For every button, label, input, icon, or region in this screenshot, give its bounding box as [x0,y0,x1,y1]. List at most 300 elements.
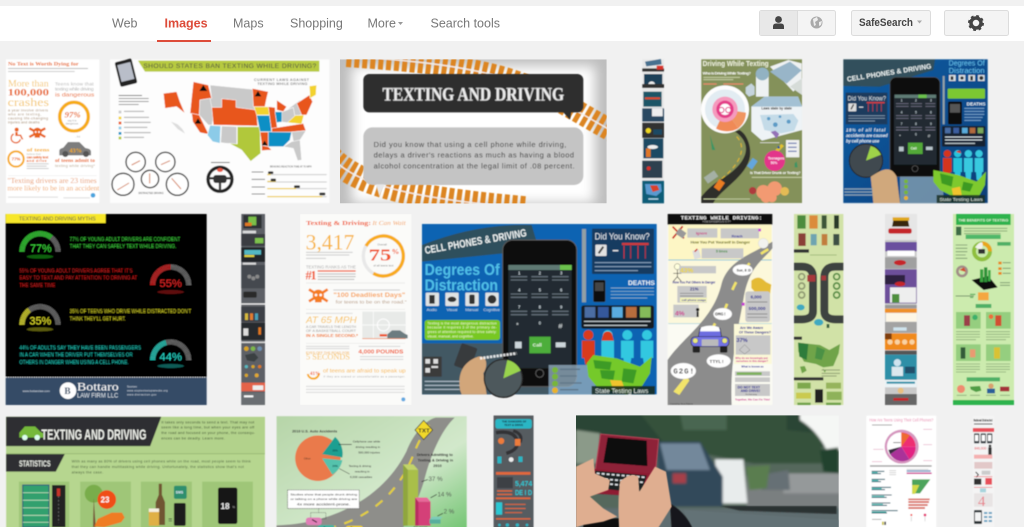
dashboard [683,510,840,527]
grey body speech bubble: delays a driver's reactions as much as having a blood [374,151,574,160]
smartphone: 6 [930,110,932,114]
block: others in danger: Sue, 8 :D [737,268,752,272]
nav tab: More: More [368,16,396,30]
thumbnail: Texting and Driving Myths gauges: OTHERS IN DANGER WHEN USING A CELL PHONE. [19,360,129,366]
thumbnail: Texting & Driving: It Can Wait [300,214,412,405]
smartphone: # [928,134,931,140]
thumbnail: Texting & Driving: It Can Wait: TEXTING RANKS AS THE [306,265,356,270]
thumbnail: National Distracted infographic: 4 [978,494,986,510]
pie chart [885,430,919,464]
personal results toggle [760,10,836,36]
smartphone: 3 [560,270,563,275]
did you know panel [592,229,654,274]
thumbnail: Texting & Driving: It Can Wait: for teens to be on the road." [336,299,407,304]
footer band: B [64,387,71,397]
smartphone: * [899,134,901,140]
thumbnail: No Text is Worth Dying For: who are texting, [8,113,41,117]
green callout [425,320,500,340]
thumbnail: Driving While Texting: Is That Driver Drunk or Texting? [750,171,801,175]
radial chart [701,85,749,133]
thumbnail: green road infographic [794,214,843,405]
green callout: Texting is the most dangerous distraction [427,321,497,325]
statistics tab [6,454,65,472]
thumbnail: Texting and Driving Myths gauges: THE SAME TIME [19,283,56,289]
footer band: www.bottarolaw.com [23,389,50,393]
speech bubble: OMG [713,308,732,320]
block: are we aware: Are We Aware [740,326,763,330]
3D bar chart: 37 % [428,476,443,483]
pie chart [292,429,381,481]
thumbnail: Texting & Driving: It Can Wait: 3,417 [306,229,354,254]
smartphone: 7 [901,122,903,126]
legend panel [549,365,595,394]
data panel: laws by state: Laws state by state [761,107,792,111]
winding road [701,130,750,203]
3D bar chart [403,464,455,527]
smartphone: 6 [560,288,563,293]
thumbnail: Texting and Driving statistics green: ences can be deadly. Learn more. [161,437,225,441]
smartphone: 1 [901,99,903,103]
pie chart: 2010 U.S. Auto Accidents [292,429,337,433]
thumbnail: National Distracted infographic: 846,000 [974,446,987,450]
block: text boxes: Reach [732,235,743,239]
block: are we aware: AND DRIVE! [741,389,760,393]
thumbnail: National Distracted infographic [973,416,994,527]
footer band: www.distraction.gov [127,392,157,396]
thumbnail: No Text is Worth Dying For: texting while driving* [55,163,95,168]
distraction icons: Cognitive [483,307,501,312]
thumbnail: Driving While Texting: Driving While Texting [703,61,769,68]
studies callout: Studies show that people drunk driving [290,492,358,496]
speedometer dials [112,152,188,195]
block: are we aware: What is known as [741,364,764,368]
thumbnail: Texting & Driving: It Can Wait: 4,000 POUNDS [358,350,404,356]
thumbnail: Driving While Texting: Who is Driving While Texting? [703,71,752,76]
people icons [582,330,653,365]
tyre tracks [340,59,607,204]
thumbnail: Cell Phones and Driving: Distraction [949,68,985,75]
thumbnail: Texting and Driving statistics green: the road and focused on your phone, the consequ- [161,431,256,435]
footer band [6,377,207,405]
thumbnail: No Text is Worth Dying For: "Texting drivers are 23 times [7,177,97,185]
map of state testing laws [587,355,655,395]
thumbnail: No Text is Worth Dying For: is dangerous [55,92,95,98]
grey body speech bubble: alcohol concentration at the legal limit of .08 percent. [374,161,575,170]
thumbnail: No Text is Worth Dying For: 77% [12,156,20,161]
thumbnail: No Text is Worth Dying For: more likely to be in an accident [7,184,99,192]
gauge 35% [22,307,58,325]
thumbnail: Texting and Driving Myths gauges: 77% [30,243,52,255]
pie chart: Other [304,456,311,460]
SafeSearch button: SafeSearch [859,17,913,29]
dark title speech bubble: TEXTING AND DRIVING [382,85,564,106]
thumbnail: Cell Phones and Driving: State Testing Laws [939,197,983,203]
smartphone: 2 [539,270,542,275]
thumbnail: No Text is Worth Dying For: can safely text [27,156,49,160]
top grey strip [0,0,1024,6]
thumbnail: Texting & Driving: It Can Wait: 5 SECONDS [306,352,350,361]
smartphone: 9 [930,122,932,126]
thumbnail: No Text is Worth Dying For: injuries and deaths [8,120,40,124]
heading: degrees of distraction: Degrees Of [425,262,500,279]
thumbnail: tall dark blue infographic [642,59,664,203]
braking reaction chart [252,166,327,197]
thumbnail: photo of hands texting at the wheel [573,413,843,527]
thumbnail: Driving While Texting [701,59,802,203]
cartoon car [691,326,729,353]
thumbnail: Texting and Driving Myths gauges: 35% OF TEENS WHO DRIVE WHILE DISTRACTED DON'T [70,309,192,315]
block: others in danger: How You Put Others in Danger [673,280,716,284]
deaths block: DEATHS [628,280,655,287]
thumbnail: Cell Phones and Driving: 18% of all fatal [846,128,886,133]
heading: degrees of distraction [425,262,500,294]
smartphone: * [516,320,519,329]
thumbnail: Texting and Driving Myths gauges: IN A CAR WHEN THE DRIVER PUT THEMSELVES OR [19,353,133,359]
stat tile: tablet 18: % [232,505,235,509]
3D bar chart: 2 % [444,509,455,516]
donut 75%: of all teens text [373,264,394,268]
thumbnail: Texting and Driving Myths gauges: 44% OF ADULTS SAY THEY HAVE BEEN PASSENGERS [19,345,141,351]
thumbnail: Should states ban texting while driving map [110,58,329,203]
dark title banner: TEXTING AND DRIVING [41,428,146,444]
gauge 55% [153,267,189,285]
block: others in danger: 21% [690,287,699,292]
thumbnail: Texting and Driving Myths gauges: 55% OF YOUNG ADULT DRIVERS AGREE THAT IT'S [19,269,133,275]
block: others in danger: 4% [675,310,685,317]
smartphone: Call [533,343,542,349]
pie chart: resulting in [355,470,370,474]
bar chart heading [417,453,454,468]
thumbnail: Texting & Driving: It Can Wait: AT 65 MPH [305,315,357,325]
speech bubble: OMG: OMG! [715,312,726,318]
smartphone: 2 [915,99,917,103]
hand on radar [844,144,900,203]
thumbnail: Should states ban texting while driving map: DISTRACTED DRIVING [138,192,164,195]
green callout: visual, manual, and cognitive. [427,334,474,338]
thumbnail: Cell Phones and Driving: CELL PHONES & DRIVING [847,63,932,84]
icon: steering wheel [208,162,232,192]
thumbnail: Texting & Driving: It Can Wait: Texting & Driving: [306,220,371,227]
thumbnail: Should states ban texting while driving map: CURRENT LAWS AGAINST [254,78,310,82]
smartphone [890,77,940,177]
stat tile: beer equals phone: SMS [176,490,184,494]
thumbnail: Texting & Driving: It Can Wait: A CAR TRAVELS THE LENGTH [306,325,356,329]
thumbnail: No Text is Worth Dying For: a year involve drivers [8,108,48,112]
smartphone: 0 [915,133,917,137]
radar hand [423,343,522,397]
distraction icons: Visual [447,307,458,312]
did you know panel: Did You Know? [848,95,886,102]
speech bubble: G2G [671,363,696,379]
stat tile: tree crash 23 [80,482,131,527]
thumbnail: No Text is Worth Dying For: believe their [27,152,41,156]
green heading banner [138,61,319,72]
dark title banner [6,417,161,446]
thumbnail: Texting & Driving: It Can Wait: of teens are afraid to speak up [323,368,406,374]
block: are we aware [734,324,772,402]
thumbnail: Cell Phones and Driving: by cell phone use [846,138,880,143]
yellow heading tab: TEXTING AND DRIVING MYTHS [19,217,96,223]
nav tab: Shopping: Shopping [290,16,343,30]
block: others in danger [673,264,771,322]
bar charts [872,469,932,525]
thumbnail: No Text is Worth Dying For: ...but [75,135,81,138]
smartphone: 8 [915,122,917,126]
smartphone: 8 [539,305,542,310]
hands [576,458,672,527]
thumbnail: The Benefits of Texting: THE BENEFITS OF TEXTING [958,218,1008,223]
thumbnail: Texting and Driving Myths gauges: 44% [159,351,183,363]
smartphone: 9 [560,305,563,310]
thumbnail: Texting While Driving road: HOW DANGEROUS IS IT? [703,221,732,224]
stat tile: football field [19,482,69,527]
navigation bar [0,6,1024,42]
thumbnail: dark grey tall infographic: THE DANGERS OF [502,419,527,423]
pie chart: 500,000 injuries [358,450,380,454]
thumbnail: Texting and Driving Myths gauges: EASY TO TEXT AND PAY ATTENTION TO DRIVING AT [19,276,138,282]
thumbnail: No Text is Worth Dying For: crashes [8,96,50,109]
thumbnail: Texting and Driving Myths gauges: 55% [159,278,183,290]
thumbnail: Texting and Driving title card [340,59,607,204]
pie chart: 28% [332,448,338,452]
thumbnail: Cell Phones and Driving: accidents are caused [846,133,888,138]
block: text boxes: Ignore [696,232,707,236]
icon: person [773,16,784,29]
green callout: because it requires 3 of the primary de- [427,326,497,330]
map of US states [163,82,317,161]
block: are we aware: ourselves in this danger? [736,359,769,363]
pie chart: 6,000 casualties [350,475,373,479]
donut 75%: 75 [369,246,391,265]
thumbnail: Texting and Driving Myths gauges [6,214,207,405]
speech bubble: G2G: G2G! [673,369,694,377]
green US map [798,343,840,376]
block: are we aware: Why do we knowingly put [735,356,768,360]
block: text boxes [673,226,768,259]
icon: phone [115,58,137,87]
isometric phone chart [956,245,1011,300]
data panel: laws by state [751,97,802,141]
did you know panel: Did You Know? [595,231,650,241]
distraction icons: Manual [465,307,479,312]
braking reaction chart: BRAKING REACTION TIME AT 70 MPH [270,166,312,169]
pie chart: driving resulting in [355,445,381,449]
stat tile: beer equals phone: = [168,517,172,524]
thumbnail: Texting and Driving statistics green: always the case. [72,470,103,474]
map of state testing laws: State Testing Laws [595,388,648,395]
thumbnail: No Text is Worth Dying For: 43% [69,148,82,155]
thumbnail: Texting and Driving statistics green [6,417,265,527]
smartphone: 5 [539,288,542,293]
thumbnail: No Text is Worth Dying For: of teens admit to [55,159,96,164]
thumbnail: Texting and Driving Myths gauges: 77% OF YOUNG ADULT DRIVERS ARE CONFIDENT [70,237,181,243]
smartphone: 5 [915,110,917,114]
thumbnail: No Text is Worth Dying For: of teens [27,148,50,154]
thumbnail: No Text is Worth Dying For [6,59,99,203]
thumbnail: dark grey tall infographic: TEXT & DRIVE [504,423,523,427]
footer band: Bottaro [77,381,119,393]
thumbnail: Texting and Driving statistics green: With as many as 80% of drivers using cell phones while on the road, most people seem to think [72,460,251,464]
block: text boxes: 5 times [716,250,728,254]
pie chart: Cellphone use while [353,440,381,444]
thumbnail: Texting & Driving: It Can Wait: OF A BASKETBALL COURT [306,329,357,333]
thumbnail: Texting and Driving statistics green: It takes only seconds to send a text. That may not [161,420,255,424]
thumbnail: Cell Phones and Driving [843,59,988,203]
pie chart: Texting & driving [349,464,371,468]
icon: TXT road sign: TXT [418,428,430,434]
studies callout [288,490,359,509]
gauge 44% [153,342,189,360]
smartphone: 7 [518,305,521,310]
dark title speech bubble [363,74,583,120]
thumbnail: Texting & Driving: It Can Wait: It Can Wait [371,220,406,227]
social apps panel [581,305,654,329]
thumbnail: Should states ban texting while driving map: TEXTING WHILE DRIVING [257,82,307,86]
thumbnail: Cell Phones and Driving, Degrees of Distraction [422,224,657,397]
icon: skull and crossbones [309,289,328,302]
donut chart [957,242,1011,276]
thumbnail: Cell Phones and Driving: DEATHS [967,101,985,106]
thumbnail: Texting and Driving Myths gauges: THINK THEY'LL GET HURT. [70,316,126,322]
thumbnail: Texting & Driving: It Can Wait: 41% [310,372,320,377]
thumbnail: How Are Teens Using Their Cell Phones: How Are Teens Using Their Cell Phones? [869,418,934,423]
thumbnail: Texting & Driving: It Can Wait: "100 Deadliest Days" [333,292,405,299]
3D bar chart: 14 % [437,491,452,498]
thumbnail: 2010 U.S. Auto Accidents road chart [277,416,467,527]
stat tile: tree crash 23: 23 [101,495,110,504]
thumbnail: Driving While Texting: Teenagers [768,156,785,160]
thumbnail: No Text is Worth Dying For: texting while driving [55,87,94,93]
thumbnail: tall grey infographic [241,214,265,405]
road [668,242,772,405]
thumbnail: Texting While Driving road [668,214,772,405]
icon: TXT road sign [415,420,433,440]
block: are we aware: 37% [736,338,748,344]
road [277,418,455,527]
did you know panel [846,93,887,124]
speech bubble: TTYL [707,354,731,368]
block: text boxes: How You Put Yourself in Danger [691,240,751,244]
footer band: LAW FIRM LLC [77,392,119,399]
thumbnail: How Are Teens Using Their Cell Phones [866,416,936,527]
thumbnail: Texting While Driving road: TEXTING WHILE DRIVING: [681,215,762,221]
distraction icons: Audio [427,307,438,312]
nav tab: Web: Web [112,16,138,30]
thumbnail: Texting and Driving Myths gauges: THAT THEY CAN SAFELY TEXT WHILE DRIVING. [70,244,177,250]
heading: degrees of distraction: Distraction [425,277,498,294]
isometric building [770,60,802,92]
block: are we aware: Together, We Can Fix This! [735,398,770,402]
thumbnail: Texting & Driving: It Can Wait: #1 [305,268,317,282]
smartphone: Call [911,147,917,151]
icon: gear [969,16,983,30]
block: are we aware: It's that easy. [746,393,758,396]
settings gear button [944,10,1008,36]
thumbnail: No Text is Worth Dying For: say it is [68,119,77,123]
road curves [794,267,843,319]
stat tile: beer equals phone [141,482,192,527]
speech bubble: TTYL: TTYL! [709,359,724,365]
block: others in danger: 43% [680,268,693,275]
bar chart heading: Drivers Admitting to [417,453,454,457]
block: others in danger: 6,000 [751,295,762,300]
bar chart heading: Texting & Driving in [418,458,454,462]
thumbnail: No Text is Worth Dying For: 97% [65,109,81,119]
stat tile: tablet 18: 18 [220,502,230,511]
gauge 77% [22,234,58,252]
distraction icons [426,293,501,312]
thumbnail: dark grey tall infographic [494,416,534,527]
yellow heading tab [6,214,106,223]
thumbnail: Texting & Driving: It Can Wait: IN A SINGLE SECOND.* [306,333,358,338]
nav tab: Images (active) [157,16,211,42]
studies callout: 4x more accident-prone. [297,502,350,506]
thumbnail: Texting and Driving statistics green: seem like a long time, but when your eyes are off [161,426,255,430]
steering wheel shadow [583,518,619,527]
green heading banner: SHOULD STATES BAN TEXTING WHILE DRIVING? [143,64,317,70]
thumbnail: No Text is Worth Dying For: and drive [27,159,47,163]
thumbnail: No Text is Worth Dying For: causing life-changing [8,116,48,120]
thumbnail: dark grey tall infographic: DE I D [515,488,532,497]
green callout: grees of attention required to drive safely: [427,330,497,334]
smartphone: 0 [539,321,542,326]
thumbnail: The Benefits of Texting [953,214,1014,405]
thumbnail: Texting & Driving: It Can Wait: EYES OFF THE ROAD FOR [306,351,350,355]
donut 75%: Overall [377,243,387,247]
SafeSearch button [852,10,930,36]
footer band: www.stoptextsstopwrecks.org [127,389,168,393]
crashed cars [306,517,363,527]
phone tiles [956,312,1011,372]
stat tile: tablet 18 [202,482,253,527]
statistics tab: STATISTICS [19,458,51,468]
bar chart heading: 2010 [433,464,442,468]
basketball court with car [362,312,408,339]
thumbnail: No Text is Worth Dying For: No Text is Worth Dying for [8,62,79,67]
smartphone: 3 [930,99,932,103]
thumbnail: Texting & Driving: It Can Wait: if they are scared or uncomfortable as a passenger. [323,374,406,378]
thumbnail: Cell Phones and Driving: Degrees Of [949,61,985,68]
smartphone: 4 [901,110,903,114]
thumbnail: Cell Phones and Driving, Degrees of Distraction: CELL PHONES & DRIVING [424,227,528,257]
flip phone [590,434,659,497]
block: are we aware: Of These Dangers? [739,331,771,335]
social panel and people icons [942,126,985,180]
nav tab: Maps: Maps [233,16,264,30]
thumbnail: purple and orange tall infographic [885,214,917,405]
thumbnail: No Text is Worth Dying For: 100,000 [8,88,49,99]
block: are we aware: DO NOT TEXT [738,385,760,389]
studies callout: or talking on a phone while driving are [290,497,358,501]
smartphone: # [558,321,563,330]
deaths block [593,280,655,302]
block: others in danger: 500,000 [749,306,766,311]
thumbnail: Texting and Driving statistics green: that they can handle multitasking while driving. Unfortunately, the statistics show that's not [72,465,245,469]
thumbnail: National Distracted infographic: National Distracted [974,418,992,422]
thumbnail: Texting and Driving Myths gauges: 35% [29,316,52,328]
footer band: Sources: [127,384,138,388]
thumbnail: No Text is Worth Dying For: More than [8,79,49,89]
donut 75% [362,234,406,278]
donut 75%: % [392,247,399,256]
grey body speech bubble: Did you know that using a cell phone while driving, [374,140,566,149]
thumbnail: dark grey tall infographic: 5,474 [515,481,532,488]
grey body speech bubble [363,127,583,196]
nav tab: Images (active): Images [164,16,208,30]
icon: globe [810,16,822,28]
smartphone [503,240,577,387]
green US map [933,170,986,197]
